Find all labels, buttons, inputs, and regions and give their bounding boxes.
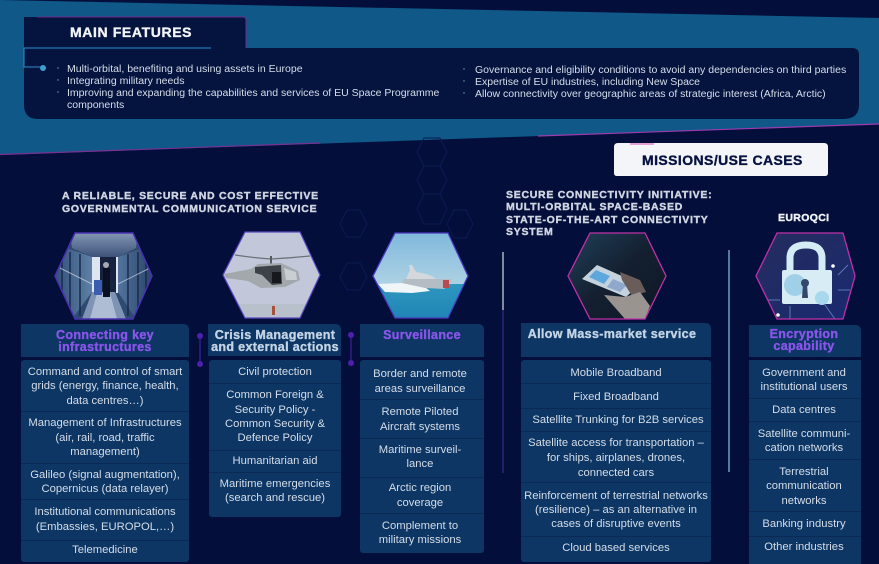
list: Mobile Broadband bbox=[570, 367, 662, 379]
list: Satellite communi- bbox=[758, 428, 851, 440]
list: Fixed Broadband bbox=[573, 391, 659, 403]
list: (air, rail, road, traffic bbox=[55, 432, 155, 444]
connector: left purple bbox=[197, 333, 203, 367]
list: (Embassies, EUROPOL,…) bbox=[36, 521, 174, 533]
section heading: governmental service: A RELIABLE, SECURE AND COST EFFECTIVE bbox=[62, 190, 319, 202]
list: Complement to bbox=[382, 520, 458, 532]
feature list left: Integrating military needs bbox=[67, 75, 184, 87]
list: Aircraft systems bbox=[380, 421, 460, 433]
list: for ships, airplanes, drones, bbox=[547, 452, 685, 464]
main features heading: MAIN FEATURES bbox=[70, 24, 192, 40]
list bbox=[21, 360, 189, 562]
list: networks bbox=[781, 495, 827, 507]
list bbox=[209, 360, 341, 517]
list: Defence Policy bbox=[237, 432, 313, 444]
missions heading: MISSIONS/USE CASES bbox=[642, 152, 803, 168]
list: Banking industry bbox=[762, 518, 846, 530]
header bbox=[208, 324, 341, 356]
column: crisis management bbox=[208, 324, 341, 517]
list bbox=[521, 360, 711, 562]
list: Maritime emergencies bbox=[220, 478, 331, 490]
feature list left: Improving and expanding the capabilities and services of EU Space Programme bbox=[67, 87, 439, 99]
column: surveillance bbox=[360, 324, 484, 553]
image hexagon: padlock bbox=[756, 233, 856, 319]
image hexagon: ship bbox=[373, 233, 469, 319]
list: Terrestrial bbox=[779, 466, 829, 478]
list: Common Foreign & bbox=[226, 389, 324, 401]
list: grids (energy, finance, health, bbox=[31, 380, 179, 392]
list: institutional users bbox=[761, 381, 848, 393]
list: data centres…) bbox=[67, 395, 144, 407]
list bbox=[749, 360, 861, 564]
list: areas surveillance bbox=[375, 383, 465, 395]
list: Data centres bbox=[772, 404, 836, 416]
list: Galileo (signal augmentation), bbox=[30, 469, 180, 481]
section heading: euroqci: EUROQCI bbox=[778, 212, 829, 224]
list bbox=[360, 360, 484, 553]
column: mass-market service bbox=[521, 323, 711, 562]
header: Encryption bbox=[770, 327, 838, 341]
list: Security Policy - bbox=[235, 404, 316, 416]
header: Connecting key bbox=[56, 328, 154, 342]
feature list left bbox=[57, 63, 439, 111]
list: Satellite Trunking for B2B services bbox=[532, 414, 704, 426]
feature list right bbox=[463, 64, 846, 100]
list: Humanitarian aid bbox=[232, 455, 318, 467]
section heading: secure connectivity bbox=[506, 189, 712, 238]
feature list right: Allow connectivity over geographic areas of strategic interest (Africa, Arctic) bbox=[475, 88, 826, 100]
header: Surveillance bbox=[383, 328, 461, 342]
list: Civil protection bbox=[238, 366, 312, 378]
list: Cloud based services bbox=[562, 542, 670, 554]
list: (resilience) – as an alternative in bbox=[535, 504, 697, 516]
header bbox=[21, 324, 189, 357]
list: lance bbox=[407, 458, 433, 470]
header: and external actions bbox=[211, 340, 339, 354]
feature list left: Multi-orbital, benefiting and using assets in Europe bbox=[67, 63, 303, 75]
header: Allow Mass-market service bbox=[528, 327, 696, 341]
section heading: secure connectivity: SECURE CONNECTIVITY INITIATIVE: bbox=[506, 189, 712, 201]
vertical divider light blue bbox=[728, 250, 730, 472]
list: military missions bbox=[379, 534, 462, 546]
hexagon background pattern bbox=[340, 138, 473, 290]
column: connecting key infrastructures bbox=[21, 324, 189, 562]
section heading: secure connectivity: STATE-OF-THE-ART CONNECTIVITY bbox=[506, 214, 708, 226]
list: coverage bbox=[397, 497, 443, 509]
section heading: governmental service bbox=[62, 190, 319, 215]
list: Management of Infrastructures bbox=[28, 417, 182, 429]
list: Reinforcement of terrestrial networks bbox=[524, 490, 708, 502]
list: Maritime surveil- bbox=[379, 444, 462, 456]
list: (search and rescue) bbox=[225, 492, 325, 504]
section heading: governmental service: GOVERNMENTAL COMMUNICATION SERVICE bbox=[62, 203, 317, 215]
list: Common Security & bbox=[225, 418, 326, 430]
section heading: secure connectivity: SYSTEM bbox=[506, 226, 554, 238]
main features tab bbox=[24, 17, 246, 48]
connector with dot bbox=[24, 48, 211, 71]
list: Arctic region bbox=[389, 482, 451, 494]
list: connected cars bbox=[578, 467, 655, 479]
list: cation networks bbox=[765, 442, 843, 454]
feature list left: components bbox=[67, 99, 124, 111]
list: management) bbox=[70, 446, 140, 458]
list: Institutional communications bbox=[34, 506, 176, 518]
image hexagon: phone in hand bbox=[568, 233, 666, 319]
header bbox=[521, 323, 711, 357]
main features panel bbox=[24, 48, 859, 119]
connector: right purple bbox=[348, 332, 354, 366]
list: communication bbox=[766, 480, 842, 492]
list: cases of disruptive events bbox=[551, 518, 681, 530]
list: Border and remote bbox=[373, 368, 467, 380]
feature list right: Governance and eligibility conditions to avoid any dependencies on third parties bbox=[475, 64, 846, 76]
list: Other industries bbox=[764, 541, 844, 553]
image hexagon: corridor bbox=[55, 233, 153, 319]
image hexagon: helicopter bbox=[223, 232, 321, 318]
list: Command and control of smart bbox=[28, 366, 183, 378]
top band bbox=[0, 0, 879, 155]
header bbox=[749, 325, 861, 357]
list: Satellite access for transportation – bbox=[528, 437, 705, 449]
section heading: secure connectivity: MULTI-ORBITAL SPACE-BASED bbox=[506, 201, 683, 213]
header bbox=[360, 324, 484, 357]
list: Telemedicine bbox=[72, 544, 138, 556]
header: infrastructures bbox=[58, 340, 152, 354]
header: Crisis Management bbox=[215, 328, 336, 342]
list: Government and bbox=[762, 367, 846, 379]
list: Copernicus (data relayer) bbox=[42, 483, 169, 495]
vertical divider bbox=[502, 252, 504, 473]
header: capability bbox=[773, 339, 835, 353]
missions tab bbox=[614, 143, 828, 176]
feature list right: Expertise of EU industries, including New Space bbox=[475, 76, 700, 88]
list: Remote Piloted bbox=[382, 406, 458, 418]
column: encryption capability bbox=[749, 325, 861, 564]
